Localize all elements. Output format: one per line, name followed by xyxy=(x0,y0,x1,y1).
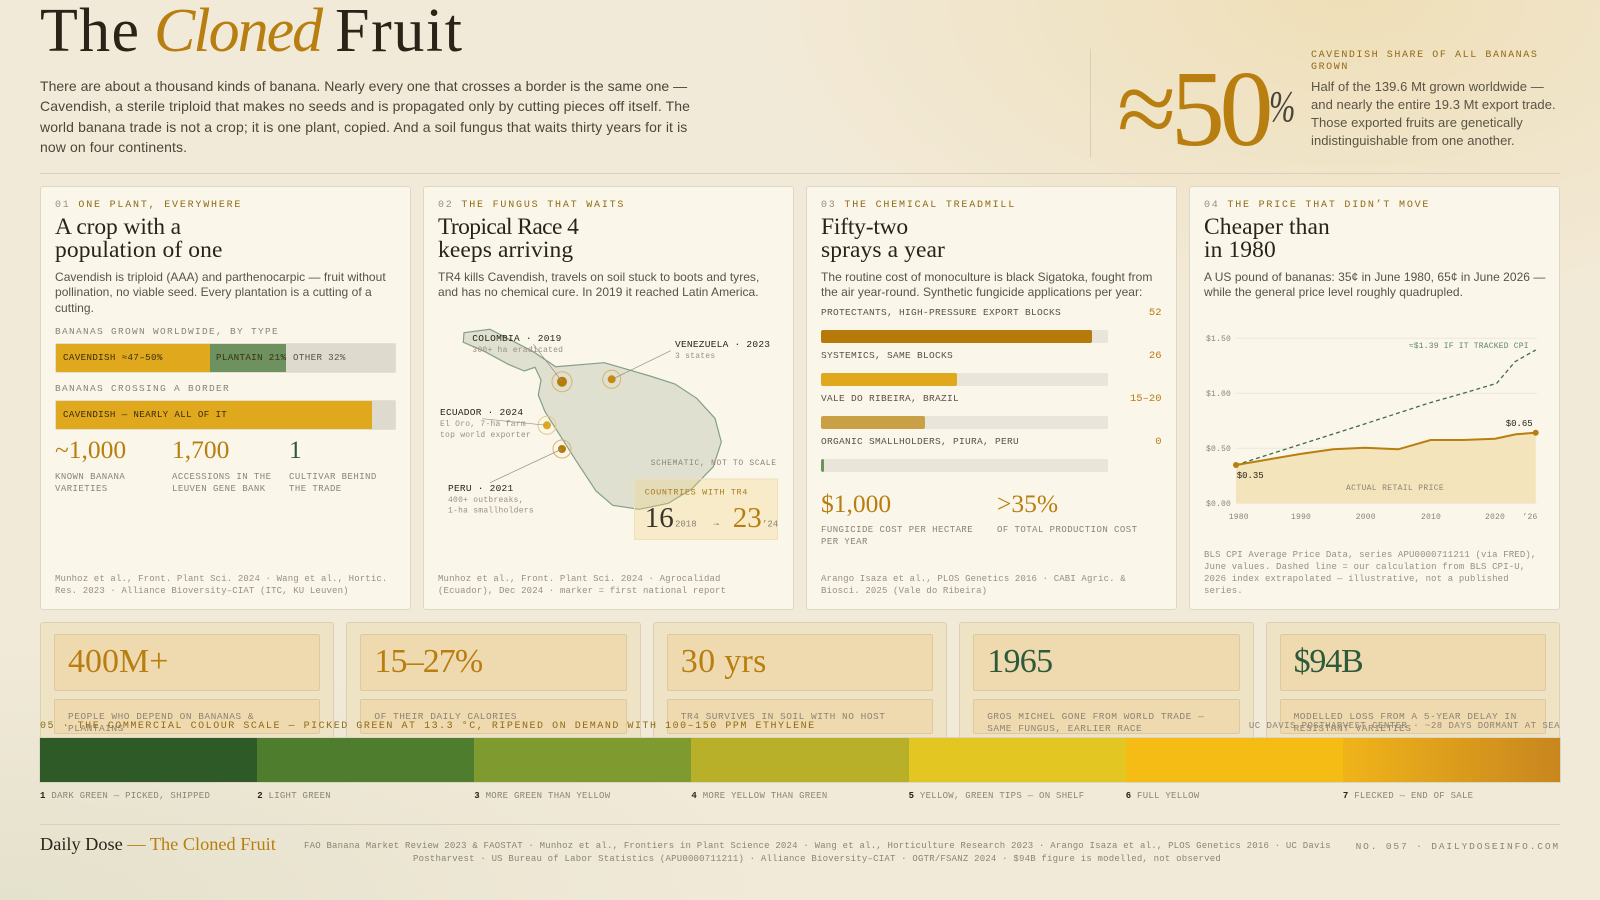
x axis labels xyxy=(1229,513,1538,522)
stat percent sign: % xyxy=(1269,82,1295,131)
source note: Biosci. 2025 (Vale do Ribeira) xyxy=(821,586,987,596)
stat label: CAVENDISH SHARE OF ALL BANANAS xyxy=(1311,50,1538,60)
footer brand: Daily Dose — The Cloned Fruit xyxy=(40,834,276,854)
segment: plantain: PLANTAIN 21% xyxy=(216,352,286,363)
stat: share of production xyxy=(997,488,1137,535)
stacked bar: grown worldwide xyxy=(55,343,396,373)
panel text: A US pound of bananas: 35¢ in June 1980, 65¢ in June 2026 — xyxy=(1204,270,1545,284)
caption box xyxy=(973,699,1240,734)
caption: CULTIVAR BEHIND xyxy=(289,472,377,482)
stat card: 400M+ xyxy=(40,622,334,762)
actual price line xyxy=(1236,433,1536,465)
stage 5 xyxy=(909,738,1126,782)
stat card: 30 yrs xyxy=(653,622,947,762)
stage 1 xyxy=(40,738,257,782)
inset: countries with TR4: → xyxy=(714,518,720,528)
scale label 3: 3 MORE GREEN THAN YELLOW xyxy=(474,791,610,801)
row label: SYSTEMICS, SAME BLOCKS xyxy=(821,350,953,361)
number box xyxy=(54,634,320,691)
start value: $0.35 xyxy=(1237,471,1264,481)
row label: VALE DO RIBEIRA, BRAZIL xyxy=(821,393,959,404)
caption box: OF THEIR DAILY CALORIES xyxy=(374,711,517,722)
row value: 0 xyxy=(1155,436,1162,448)
segment: Cavendish export xyxy=(56,401,372,429)
start point xyxy=(1233,462,1239,468)
segment: plantain xyxy=(210,344,286,372)
stat description: and nearly the entire 19.3 Mt export trade. xyxy=(1311,97,1556,112)
caption box: GROS MICHEL GONE FROM WORLD TRADE — xyxy=(987,711,1204,722)
stat number: ≈50 xyxy=(1117,50,1268,169)
marker: Peru: 400+ outbreaks, xyxy=(448,496,524,505)
source note xyxy=(55,574,387,596)
bar row: organic smallholders xyxy=(821,436,1162,472)
caption: THE TRADE xyxy=(289,484,342,494)
panel text xyxy=(438,270,759,299)
inset: countries with TR4: COUNTRIES WITH TR4 xyxy=(645,488,748,498)
panel heading: Tropical Race 4 xyxy=(438,214,578,240)
panel heading: in 1980 xyxy=(1204,237,1276,263)
footer sources xyxy=(304,840,1330,866)
row value: 15–20 xyxy=(1130,393,1162,405)
x axis labels: 1990 xyxy=(1291,513,1311,522)
caption box: MODELLED LOSS FROM A 5-YEAR DELAY IN xyxy=(1294,711,1517,722)
stat: accessions xyxy=(172,435,271,494)
stage 4 xyxy=(691,738,909,782)
CPI annotation: ≈$1.39 IF IT TRACKED CPI xyxy=(1409,342,1529,351)
scale label 6: 6 FULL YELLOW xyxy=(1126,791,1199,801)
marker: Venezuela xyxy=(603,339,770,388)
caption: ACCESSIONS IN THE xyxy=(172,472,271,482)
stat label xyxy=(1311,50,1538,72)
scale label 5: 5 YELLOW, GREEN TIPS — ON SHELF xyxy=(909,791,1084,801)
source note xyxy=(1204,550,1536,596)
panel heading: population of one xyxy=(55,237,222,263)
footer issue: NO. 057 · DAILYDOSEINFO.COM xyxy=(1356,840,1560,852)
stat card: 1965 xyxy=(959,622,1254,762)
y axis labels: $1.00 xyxy=(1206,390,1231,399)
CPI dashed line xyxy=(1236,350,1536,465)
stat: cultivar xyxy=(289,435,377,494)
value: 1,700 xyxy=(172,435,229,464)
panel eyebrow: 04 THE PRICE THAT DIDN’T MOVE xyxy=(1204,200,1430,211)
number box xyxy=(667,634,933,691)
y axis labels: $1.50 xyxy=(1206,335,1231,344)
source note: Arango Isaza et al., PLOS Genetics 2016 · CABI Agric. & xyxy=(821,574,1126,584)
panel text xyxy=(821,270,1152,299)
caption xyxy=(55,472,125,494)
end value: $0.65 xyxy=(1506,419,1533,429)
number box: 1965 xyxy=(987,643,1052,680)
scale label 7: 7 FLECKED — END OF SALE xyxy=(1343,791,1473,801)
stat: fungicide cost xyxy=(821,488,973,547)
schematic map xyxy=(440,328,778,540)
y axis labels xyxy=(1206,335,1231,509)
panel heading: sprays a year xyxy=(821,237,945,263)
x axis labels: 1980 xyxy=(1229,513,1249,522)
number box xyxy=(360,634,627,691)
marker: Colombia: COLOMBIA · 2019 xyxy=(472,333,562,344)
stat description: Those exported fruits are genetically xyxy=(1311,115,1523,130)
panel heading: Fifty-two xyxy=(821,214,908,240)
headline stat: about 50 percent xyxy=(1090,49,1561,157)
number box xyxy=(973,634,1240,691)
panel text: pollination, no viable seed. Every plantation is a cutting of a xyxy=(55,285,372,299)
y axis labels: $0.50 xyxy=(1206,445,1231,454)
caption xyxy=(821,525,973,547)
inset: countries with TR4 xyxy=(634,479,778,540)
caption box: SAME FUNGUS, EARLIER RACE xyxy=(987,723,1142,734)
inset: countries with TR4: 16 xyxy=(645,502,674,534)
panel text: the air year-round. Synthetic fungicide applications per year: xyxy=(821,285,1142,299)
bar label: border: BANANAS CROSSING A BORDER xyxy=(55,383,230,394)
caption box: TR4 SURVIVES IN SOIL WITH NO HOST xyxy=(681,711,885,722)
panel eyebrow: 03 THE CHEMICAL TREADMILL xyxy=(821,200,1016,211)
marker: Ecuador: top world exporter xyxy=(440,431,531,440)
title xyxy=(40,0,464,65)
intro paragraph: now on four continents. xyxy=(40,139,187,155)
scale label 1: 1 DARK GREEN — PICKED, SHIPPED xyxy=(40,791,210,801)
y axis labels: $0.00 xyxy=(1206,500,1231,509)
source note: (Ecuador), Dec 2024 · marker = first national report xyxy=(438,586,726,596)
source note: 2026 index extrapolated — illustrative, not a published xyxy=(1204,574,1509,584)
panel eyebrow: 02 THE FUNGUS THAT WAITS xyxy=(438,200,625,211)
panel text: while the general price level roughly quadrupled. xyxy=(1204,285,1463,299)
stage 2 xyxy=(257,738,474,782)
marker: Ecuador: ECUADOR · 2024 xyxy=(440,407,523,418)
panel text: The routine cost of monoculture is black Sigatoka, fought from xyxy=(821,270,1152,284)
source note xyxy=(438,574,726,596)
scale label 2: 2 LIGHT GREEN xyxy=(257,791,331,801)
x axis labels: 2010 xyxy=(1421,513,1441,522)
stage 7 xyxy=(1343,738,1560,782)
marker: Colombia: 300+ ha eradicated xyxy=(472,346,563,355)
source note: BLS CPI Average Price Data, series APU0000711211 (via FRED), xyxy=(1204,550,1536,560)
caption: FUNGICIDE COST PER HECTARE xyxy=(821,525,973,535)
panel text: TR4 kills Cavendish, travels on soil stuck to boots and tyres, xyxy=(438,270,759,284)
caption box xyxy=(360,699,627,734)
caption: LEUVEN GENE BANK xyxy=(172,484,266,494)
stacked bar: crossing a border xyxy=(55,400,396,430)
map silhouette xyxy=(463,329,721,509)
footer sources: FAO Banana Market Review 2023 & FAOSTAT · Munhoz et al., Frontiers in Plant Science 2024 · Wang et al., Horticulture Research 2023 · Arango Isaza et al., PLOS Genetics 2016 · UC Davis xyxy=(304,840,1331,850)
line chart: price xyxy=(1206,335,1539,522)
map note: SCHEMATIC, NOT TO SCALE xyxy=(651,459,777,468)
panel heading xyxy=(55,214,222,263)
caption xyxy=(289,472,377,494)
caption: PER YEAR xyxy=(821,537,868,547)
panel: 03 the chemical treadmill xyxy=(806,186,1177,610)
panel text xyxy=(55,270,386,315)
panel heading xyxy=(821,214,945,263)
marker: Colombia xyxy=(472,333,572,392)
caption box: PEOPLE WHO DEPEND ON BANANAS & xyxy=(68,711,254,722)
source note: June values. Dashed line = our calculation from BLS CPI-U, xyxy=(1204,562,1525,572)
number box xyxy=(1280,634,1546,691)
panel heading xyxy=(1204,214,1330,263)
segment: Cavendish export: CAVENDISH — NEARLY ALL OF IT xyxy=(63,409,227,420)
colour scale note: UC DAVIS POSTHARVEST CENTER · ~28 DAYS DORMANT AT SEA xyxy=(1249,721,1560,731)
number box: $94B xyxy=(1294,643,1362,680)
row value: 52 xyxy=(1149,307,1162,319)
stat: varieties xyxy=(55,435,126,494)
footer sources: Postharvest · US Bureau of Labor Statistics (APU0000711211) · Alliance Bioversity–CIAT · OGTR/FSANZ 2024 · $94B figure is modelled, not observed xyxy=(413,854,1221,864)
source note: Res. 2023 · Alliance Bioversity–CIAT (ITC, KU Leuven) xyxy=(55,586,349,596)
marker: Peru: 1-ha smallholders xyxy=(448,506,534,516)
stat description: Half of the 139.6 Mt grown worldwide — xyxy=(1311,78,1544,94)
row value: 26 xyxy=(1149,350,1162,362)
value: ~1,000 xyxy=(55,435,126,464)
marker: Ecuador xyxy=(440,407,556,440)
bar xyxy=(821,373,1108,386)
colour scale strip xyxy=(40,738,1560,782)
bar row: systemics xyxy=(821,350,1162,386)
number box: 15–27% xyxy=(374,643,482,680)
intro paragraph: Cavendish, a sterile triploid that makes no seeds and is propagated only by cutting pieces off itself. The xyxy=(40,98,690,114)
area label: ACTUAL RETAIL PRICE xyxy=(1346,484,1444,493)
panel heading xyxy=(438,214,578,263)
bar xyxy=(821,459,1108,472)
x axis labels: 2000 xyxy=(1356,513,1376,522)
source note: Munhoz et al., Front. Plant Sci. 2024 · Wang et al., Hortic. xyxy=(55,574,387,584)
scale label 4: 4 MORE YELLOW THAN GREEN xyxy=(691,791,828,801)
caption box xyxy=(1280,699,1546,734)
segment: Cavendish xyxy=(56,344,210,372)
stat label: GROWN xyxy=(1311,62,1349,72)
intro paragraph: world banana trade is not a crop; it is one plant, copied. And a soil fungus that waits thirty years for it is xyxy=(40,119,687,135)
panel: 02 the fungus xyxy=(423,186,794,610)
caption: KNOWN BANANA xyxy=(55,472,125,482)
panel text: cutting. xyxy=(55,301,94,315)
caption box xyxy=(667,699,933,734)
panel heading: keeps arriving xyxy=(438,237,573,263)
panel eyebrow: 01 ONE PLANT, EVERYWHERE xyxy=(55,200,242,211)
bar row: protectants xyxy=(821,307,1162,343)
bar xyxy=(821,330,1108,343)
row label: PROTECTANTS, HIGH-PRESSURE EXPORT BLOCKS xyxy=(821,307,1061,318)
panel heading: Cheaper than xyxy=(1204,214,1330,240)
colour scale heading: 05 · THE COMMERCIAL COLOUR SCALE — PICKED GREEN AT 13.3 °C, RIPENED ON DEMAND WITH 100–150 PPM ETHYLENE xyxy=(40,721,816,732)
x axis labels: 2020 xyxy=(1485,513,1505,522)
source note: series. xyxy=(1204,586,1243,596)
stat description: indistinguishable from one another. xyxy=(1311,133,1515,148)
caption: VARIETIES xyxy=(55,484,108,494)
bar xyxy=(821,416,1108,429)
segment: Cavendish: CAVENDISH ≈47–50% xyxy=(63,352,163,363)
source note: Munhoz et al., Front. Plant Sci. 2024 · Agrocalidad xyxy=(438,574,721,584)
marker: Peru: PERU · 2021 xyxy=(448,483,514,494)
inset: countries with TR4: ’24 xyxy=(762,520,778,530)
caption xyxy=(172,472,271,494)
panel text: and has no chemical cure. In 2019 it reached Latin America. xyxy=(438,285,759,299)
panel heading: A crop with a xyxy=(55,214,181,240)
stage 3 xyxy=(474,738,691,782)
segment: other: OTHER 32% xyxy=(293,352,346,363)
actual price area xyxy=(1236,433,1536,503)
caption box: PLANTAINS xyxy=(68,723,124,734)
bar label: grown: BANANAS GROWN WORLDWIDE, BY TYPE xyxy=(55,326,279,337)
stat card: 15-27% xyxy=(346,622,641,762)
stat description xyxy=(1311,78,1556,148)
caption box: RESISTANT VARIETIES xyxy=(1294,723,1411,734)
x axis labels: ’26 xyxy=(1522,513,1538,522)
inset: countries with TR4: 2018 xyxy=(675,520,697,530)
marker: Ecuador: El Oro, 7-ha farm xyxy=(440,420,526,429)
source note xyxy=(821,574,1126,596)
panel: 04 the price xyxy=(1189,186,1560,610)
caption box xyxy=(54,699,320,734)
intro paragraph xyxy=(40,78,690,155)
marker: Venezuela: 3 states xyxy=(675,352,715,361)
end point xyxy=(1533,430,1539,436)
bar row: Vale do Ribeira xyxy=(821,393,1162,429)
marker: Venezuela: VENEZUELA · 2023 xyxy=(675,339,770,350)
panel: 01 one plant xyxy=(40,186,411,610)
value: >35% xyxy=(997,488,1058,518)
panel text: Cavendish is triploid (AAA) and parthenocarpic — fruit without xyxy=(55,270,386,284)
stage 6 xyxy=(1126,738,1343,782)
panel text xyxy=(1204,270,1546,299)
number box: 400M+ xyxy=(68,643,168,680)
number box: 30 yrs xyxy=(681,643,767,680)
intro paragraph: There are about a thousand kinds of banana. Nearly every one that crosses a border is the same one — xyxy=(40,78,687,94)
marker: Peru xyxy=(448,440,571,516)
caption: OF TOTAL PRODUCTION COST xyxy=(997,525,1137,535)
inset: countries with TR4: 23 xyxy=(733,502,762,534)
value: 1 xyxy=(289,435,302,464)
value: $1,000 xyxy=(821,488,891,518)
stat card: $94B xyxy=(1266,622,1560,762)
row label: ORGANIC SMALLHOLDERS, PIURA, PERU xyxy=(821,436,1019,447)
